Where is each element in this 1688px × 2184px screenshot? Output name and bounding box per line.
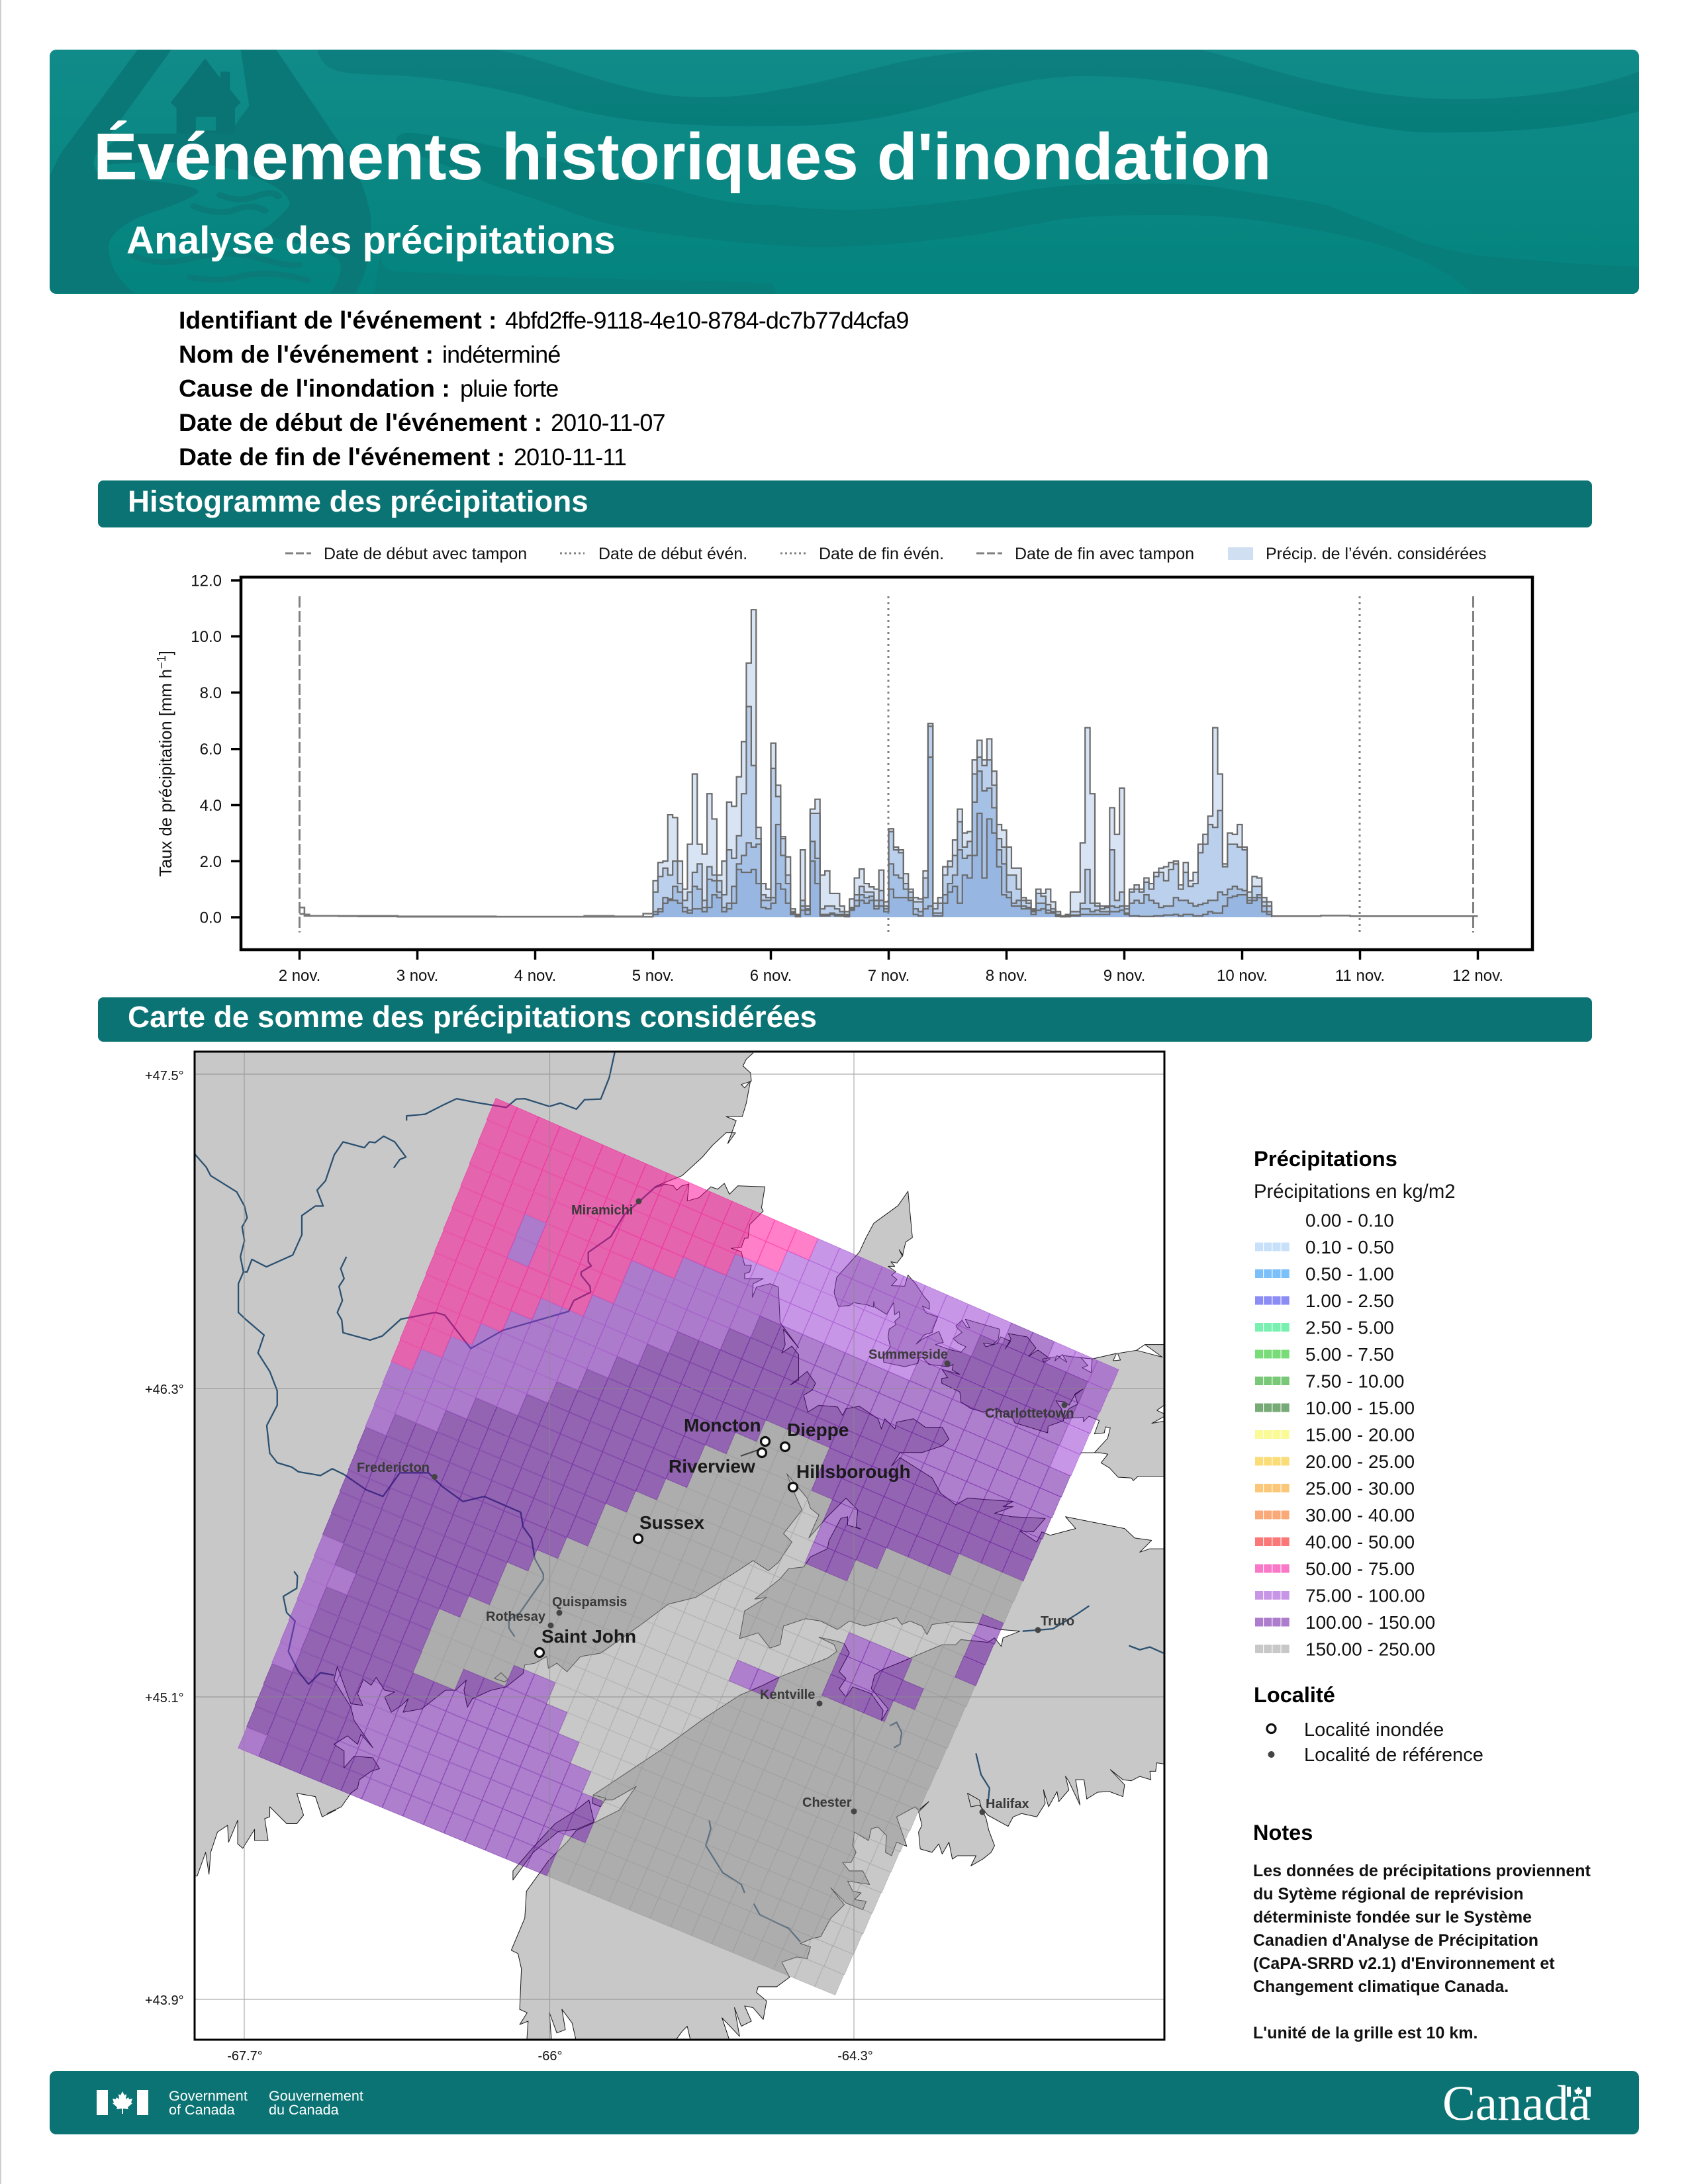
y axis title: Taux de précipitation [mm h	[157, 669, 175, 877]
longitude labels	[227, 2049, 873, 2064]
event metadata block: 2010-11-11	[514, 443, 626, 471]
Canada wordmark: Canada	[1442, 2076, 1591, 2131]
chart legend: Date de fin évén.	[819, 545, 944, 563]
event metadata block: pluie forte	[460, 375, 558, 402]
subtitle: Analyse des précipitations	[126, 219, 616, 262]
precipitation legend: 20.00 - 25.00	[1305, 1451, 1415, 1472]
precipitation legend: 0.50 - 1.00	[1305, 1264, 1394, 1284]
event metadata block	[179, 306, 909, 471]
section heading: histogram	[98, 480, 1592, 527]
longitude labels: -67.7°	[227, 2049, 263, 2064]
precipitation legend: 0.00 - 0.10	[1305, 1210, 1394, 1231]
precipitation legend: 30.00 - 40.00	[1305, 1505, 1415, 1525]
section heading: map	[98, 997, 1592, 1042]
axes frame	[241, 577, 1532, 950]
precipitation legend: 10.00 - 15.00	[1305, 1398, 1415, 1418]
y axis ticks and labels: 6.0	[200, 741, 222, 758]
event metadata block: Identifiant de l'événement :	[179, 306, 497, 334]
notes: L'unité de la grille est 10 km.	[1253, 2024, 1477, 2042]
locality legend: Localité	[1254, 1683, 1335, 1707]
reference locality labels: Halifax	[986, 1797, 1029, 1811]
precipitation grid	[238, 1098, 1119, 1995]
reference locality markers	[432, 1198, 1067, 1815]
Government of Canada flag signature: Government	[169, 2087, 248, 2104]
x axis ticks and labels: 9 nov.	[1103, 967, 1145, 985]
longitude labels: -66°	[538, 2049, 562, 2064]
longitude labels: -64.3°	[837, 2049, 873, 2064]
reference locality labels: Chester	[802, 1796, 852, 1810]
land masses	[189, 1049, 1168, 2045]
chart legend: Date de début évén.	[598, 545, 747, 563]
latitude labels	[145, 1069, 184, 2008]
Government of Canada flag signature	[97, 2087, 363, 2118]
precipitation legend: 2.50 - 5.00	[1305, 1317, 1394, 1338]
rivers	[195, 1052, 1164, 1942]
precipitation legend: 15.00 - 20.00	[1305, 1424, 1415, 1445]
notes: Notes	[1253, 1821, 1313, 1844]
y axis ticks and labels	[191, 572, 241, 927]
Government of Canada flag signature: Gouvernement	[269, 2087, 363, 2104]
precipitation legend: 50.00 - 75.00	[1305, 1559, 1415, 1579]
reference locality labels: Quispamsis	[552, 1595, 627, 1610]
event metadata block: Date de début de l'événement :	[179, 408, 542, 436]
reference locality labels	[357, 1203, 1074, 1811]
precipitation legend: 5.00 - 7.50	[1305, 1344, 1394, 1365]
flooded locality markers	[535, 1437, 797, 1657]
x axis ticks and labels: 10 nov.	[1217, 967, 1268, 985]
flooded locality labels: Sussex	[639, 1512, 704, 1533]
reference locality labels: Charlottetown	[985, 1406, 1074, 1421]
event metadata block: 4bfd2ffe-9118-4e10-8784-dc7b77d4cfa9	[505, 307, 909, 334]
x axis ticks and labels	[279, 950, 1503, 985]
flooded locality labels: Hillsborough	[796, 1461, 911, 1482]
notes: déterministe fondée sur le Système	[1253, 1908, 1532, 1927]
title: Événements historiques d'inondation	[93, 120, 1272, 194]
precipitation legend: 7.50 - 10.00	[1305, 1371, 1404, 1391]
section heading: histogram: Histogramme des précipitations	[128, 484, 588, 518]
x axis ticks and labels: 4 nov.	[514, 967, 556, 985]
precipitation legend	[1254, 1146, 1456, 1660]
notes: Canadien d'Analyse de Précipitation	[1253, 1931, 1538, 1950]
Government of Canada flag signature: du Canada	[269, 2101, 340, 2118]
precipitation histogram	[155, 572, 1532, 985]
latitude labels: +43.9°	[145, 1993, 184, 2008]
y axis ticks and labels: 8.0	[200, 684, 222, 702]
Government of Canada flag signature: of Canada	[169, 2101, 236, 2118]
section heading: map: Carte de somme des précipitations considérées	[128, 1000, 817, 1034]
notes: Changement climatique Canada.	[1253, 1978, 1509, 1996]
map of accumulated precipitation	[145, 1049, 1168, 2064]
reference locality labels: Kentville	[760, 1688, 815, 1702]
event metadata block: Date de fin de l'événement :	[179, 443, 505, 471]
y axis ticks and labels: 12.0	[191, 572, 222, 590]
event metadata block: Cause de l'inondation :	[179, 375, 450, 402]
x axis ticks and labels: 5 nov.	[632, 967, 674, 985]
precipitation legend: 0.10 - 0.50	[1305, 1237, 1394, 1257]
latitude labels: +47.5°	[145, 1069, 184, 1083]
x axis ticks and labels: 3 nov.	[397, 967, 438, 985]
chart legend: Date de début avec tampon	[324, 545, 527, 563]
locality legend: Localité de référence	[1304, 1745, 1483, 1766]
y axis ticks and labels: 10.0	[191, 628, 222, 646]
flooded locality labels: Saint John	[541, 1626, 636, 1647]
y axis ticks and labels: 4.0	[200, 797, 222, 815]
step series	[653, 610, 1272, 917]
reference locality labels: Truro	[1041, 1614, 1074, 1629]
precipitation legend: 40.00 - 50.00	[1305, 1531, 1415, 1553]
header banner	[50, 50, 1639, 294]
precipitation legend: 75.00 - 100.00	[1305, 1586, 1425, 1606]
chart legend	[285, 545, 1487, 563]
x axis ticks and labels: 12 nov.	[1452, 967, 1503, 985]
latitude labels: +46.3°	[145, 1383, 184, 1397]
precipitation legend: 100.00 - 150.00	[1305, 1612, 1435, 1633]
date lines	[299, 596, 1474, 933]
precipitation legend: Précipitations en kg/m2	[1254, 1181, 1456, 1203]
precipitation legend: 1.00 - 2.50	[1305, 1291, 1394, 1311]
x axis ticks and labels: 6 nov.	[750, 967, 792, 985]
x axis ticks and labels: 8 nov.	[986, 967, 1027, 985]
y axis title: ]	[157, 651, 175, 655]
notes	[1253, 1821, 1591, 2042]
event metadata block: Nom de l'événement :	[179, 340, 434, 368]
footer banner	[50, 2071, 1639, 2134]
y axis ticks and labels: 2.0	[200, 853, 222, 871]
flooded locality labels: Dieppe	[787, 1420, 849, 1440]
precipitation legend: 150.00 - 250.00	[1305, 1639, 1435, 1660]
precipitation legend: 25.00 - 30.00	[1305, 1479, 1415, 1498]
x axis ticks and labels: 11 nov.	[1335, 967, 1385, 985]
x axis ticks and labels: 2 nov.	[279, 967, 320, 985]
latitude labels: +45.1°	[145, 1691, 184, 1706]
near-zero baseline traces	[299, 907, 1478, 917]
event metadata block: indéterminé	[442, 341, 560, 368]
chart legend: Date de fin avec tampon	[1015, 545, 1194, 563]
locality legend	[1254, 1683, 1483, 1766]
locality legend: Localité inondée	[1304, 1719, 1444, 1741]
event metadata block: 2010-11-07	[551, 409, 665, 436]
x axis ticks and labels: 7 nov.	[868, 967, 910, 985]
reference locality labels: Summerside	[868, 1347, 948, 1362]
legend swatches	[1255, 1247, 1289, 1649]
flooded locality labels	[541, 1415, 911, 1647]
chart legend: Précip. de l’évén. considérées	[1266, 545, 1487, 563]
notes: du Sytème régional de reprévision	[1253, 1885, 1523, 1903]
precipitation legend: Précipitations	[1254, 1146, 1397, 1171]
notes: Les données de précipitations proviennent	[1253, 1862, 1591, 1880]
flooded locality labels: Riverview	[669, 1456, 755, 1477]
reference locality labels: Miramichi	[571, 1203, 633, 1218]
reference locality labels: Rothesay	[486, 1610, 546, 1624]
y axis ticks and labels: 0.0	[200, 909, 222, 927]
flooded locality labels: Moncton	[684, 1415, 761, 1435]
reference locality labels: Fredericton	[357, 1461, 430, 1475]
notes: (CaPA-SRRD v2.1) d'Environnement et	[1253, 1954, 1555, 1973]
y axis title: −1	[155, 655, 168, 669]
